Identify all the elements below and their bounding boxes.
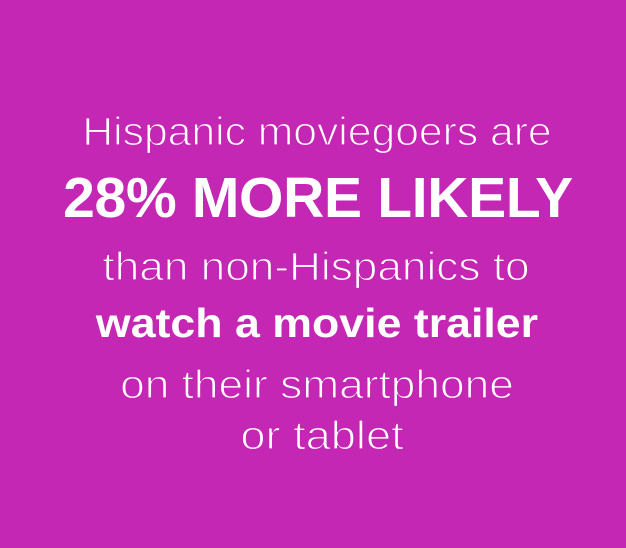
text: comparison line: than non-Hispanics to — [102, 245, 530, 289]
text: intro line: Hispanic moviegoers are — [82, 110, 552, 154]
subheading: watch a movie trailer: watch a movie trailer — [95, 300, 538, 346]
text: device line: on their smartphone — [120, 363, 514, 407]
text: closing line: or tablet — [240, 414, 404, 458]
heading: 28% more likely: 28% MORE LIKELY — [63, 166, 573, 230]
